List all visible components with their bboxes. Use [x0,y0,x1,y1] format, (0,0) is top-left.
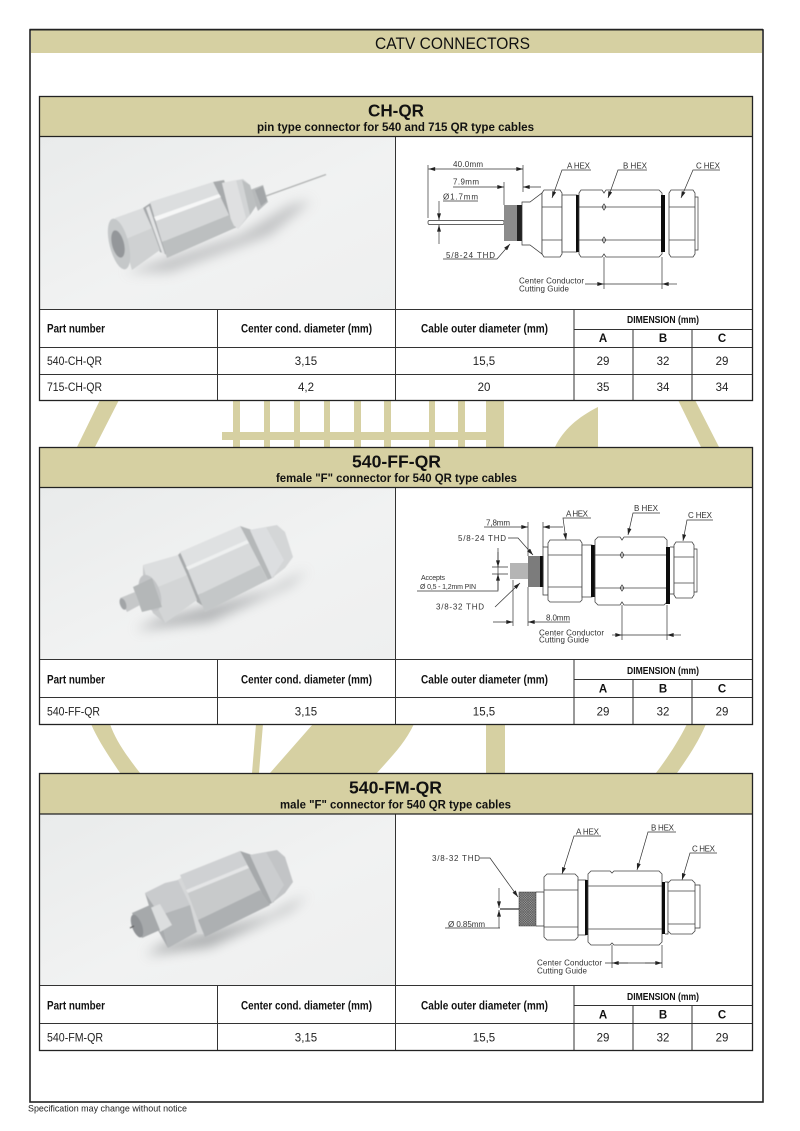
dimension lines: Cutting Guide [537,966,588,976]
spec table: CH-QR: 34 [657,382,670,394]
dimension lines: B HEX [651,824,675,832]
dimension lines: Accepts [421,575,446,582]
spec table: 540-FM-QR: 540-FM-QR [47,1032,103,1044]
spec table: 540-FF-QR: A [599,684,607,696]
header band: CH-QR: pin type connector for 540 and 715 QR type cables [257,122,534,134]
spec table: 540-FF-QR: 29 [597,706,609,718]
header band: 540-FF-QR [40,448,752,488]
dimension lines: 8.0mm [546,614,570,622]
technical drawing: CH-QR [428,160,721,294]
dimension lines: 7.9mm [453,178,479,186]
nut: C hex [668,880,695,934]
dimension lines: Cutting Guide [519,284,570,294]
dimension lines: C HEX [688,511,713,520]
spec table: CH-QR: 715-CH-QR [47,382,102,394]
spec table: CH-QR: 29 [597,356,609,368]
dimension lines: C HEX [692,844,716,854]
spec table: 540-FF-QR: DIMENSION (mm) [627,665,699,677]
panel: CH-QR [40,96,752,400]
technical drawing: 540-FF-QR [417,504,713,644]
header band: 540-FM-QR: 540-FM-QR [349,778,442,798]
spec table: 540-FF-QR: B [659,684,667,696]
background watermark logo [77,400,719,773]
dimension lines: 3/8-32 THD [436,602,484,612]
spec table: CH-QR: 32 [657,356,669,368]
spec table: CH-QR: 34 [716,382,729,394]
spec table: 540-FM-QR: 29 [716,1032,728,1044]
panel: 540-FF-QR [40,448,752,724]
spec table: 540-FF-QR: 3,15 [295,706,317,718]
spec table: CH-QR: C [718,333,726,345]
spec table: 540-FM-QR: Cable outer diameter (mm) [421,1000,548,1012]
dimension lines [428,160,721,294]
spec table: 540-FM-QR: DIMENSION (mm) [627,991,699,1003]
spec table: CH-QR: 35 [597,382,609,394]
dimension lines: 40.0mm [453,160,483,169]
spec table: 540-FM-QR: 29 [597,1032,609,1044]
photo: pin type connector [40,137,395,309]
spec table: CH-QR: 540-CH-QR [47,356,102,368]
spec table: CH-QR: 29 [716,356,728,368]
spec table: CH-QR: Cable outer diameter (mm) [421,324,548,336]
dimension lines [432,824,717,976]
spec table: 540-FM-QR: Center cond. diameter (mm) [241,1000,372,1012]
spec table: CH-QR: DIMENSION (mm) [627,314,699,326]
dimension lines: Center Conductor [537,958,602,968]
body: B hex [588,871,662,945]
spec table: CH-QR: 20 [478,382,490,394]
panel: 540-FM-QR [40,774,752,1050]
header band: 540-FM-QR [40,774,752,814]
title: CATV CONNECTORS [375,34,530,53]
technical drawing: 540-FM-QR [432,824,717,976]
spec table: 540-FF-QR: Center cond. diameter (mm) [241,674,372,686]
nut: C hex [674,542,694,598]
dimension lines: 3/8-32 THD [432,854,480,863]
dimension lines: A HEX [566,510,589,518]
spec table: 540-FF-QR: Cable outer diameter (mm) [421,674,548,686]
spec table: 540-FM-QR: 15,5 [473,1032,495,1044]
spec table: CH-QR: Center cond. diameter (mm) [241,324,372,336]
body: B hex [579,190,662,257]
spec table: 540-FM-QR: A [599,1010,607,1022]
spec table: 540-FF-QR: C [718,684,726,696]
spec table: 540-FF-QR: 15,5 [473,706,495,718]
nut: C hex [669,190,695,257]
spec table: CH-QR [40,136,752,400]
dimension lines: 5/8-24 THD [458,534,506,543]
spec table: 540-FF-QR: 29 [716,706,728,718]
spec table: 540-FF-QR: 540-FF-QR [47,706,100,718]
dimension lines: Ø 0.85mm [448,920,485,929]
spec table: CH-QR: Part number [47,324,105,336]
body: B hex [595,537,667,605]
nut: A hex [542,190,562,257]
header band: CH-QR: CH-QR [368,100,424,120]
dimension lines: Cutting Guide [539,636,590,644]
dimension lines: A HEX [576,828,600,836]
header band: 540-FM-QR: male "F" connector for 540 QR type cables [280,800,511,812]
spec table: 540-FM-QR: Part number [47,1000,105,1012]
dimension lines: 5/8-24 THD [446,251,495,260]
dimension lines: 7,8mm [486,518,510,528]
nut: A hex [548,540,582,602]
spec table: CH-QR: A [599,333,607,345]
dimension lines [417,504,713,644]
spec table: 540-FF-QR: 32 [657,706,669,718]
spec table: 540-FM-QR [40,814,752,1050]
photo: female F connector [40,488,395,659]
dimension lines: B HEX [634,504,659,513]
nut: A hex [544,874,578,940]
spec table: 540-FM-QR: 3,15 [295,1032,317,1044]
spec table: CH-QR: B [659,333,667,345]
dimension lines: Center Conductor [539,628,604,638]
header band: 540-FF-QR: female "F" connector for 540 QR type cables [276,473,517,485]
photo: male F connector [40,814,395,986]
spec table: 540-FM-QR: 32 [657,1032,669,1044]
spec table: 540-FF-QR: Part number [47,674,105,686]
dimension lines: C HEX [696,162,721,170]
spec table: CH-QR: 15,5 [473,356,495,368]
dimension lines: B HEX [623,162,648,170]
dimension lines: A HEX [567,162,591,170]
spec table: CH-QR: 3,15 [295,356,317,368]
header band: 540-FF-QR: 540-FF-QR [352,452,441,472]
header band: CH-QR [40,96,752,136]
spec table: 540-FF-QR [40,488,752,724]
spec table: CH-QR: 4,2 [298,382,314,394]
footnote: Specification may change without notice [28,1104,187,1114]
dimension lines: Ø 0,5 - 1,2mm PIN [420,584,476,591]
dimension lines: Ø1.7mm [443,192,478,202]
spec table: 540-FM-QR: B [659,1010,667,1022]
spec table: 540-FM-QR: C [718,1010,726,1022]
dimension lines: Center Conductor [519,276,584,286]
